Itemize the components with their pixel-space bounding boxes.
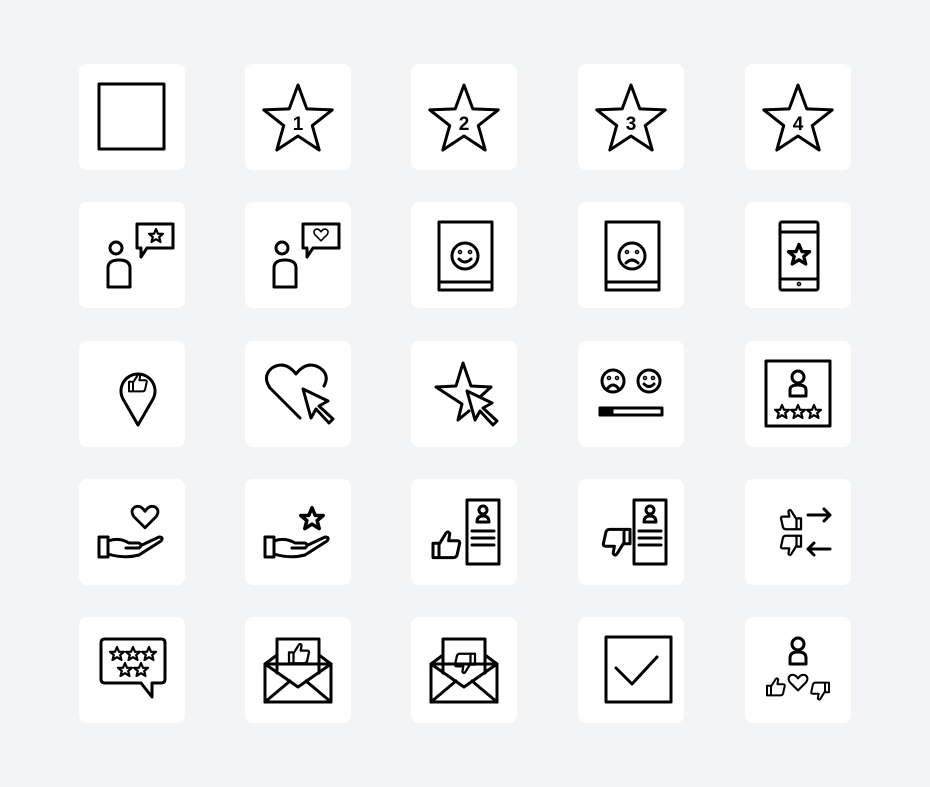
tile: thumbs with arrows xyxy=(745,479,851,585)
tile: star 4 xyxy=(745,64,851,170)
tile: star 1: 1 xyxy=(293,114,304,135)
tile: phone smile xyxy=(411,202,517,308)
tile: person with reactions xyxy=(745,617,851,723)
tile: star 3: 3 xyxy=(626,114,636,135)
tile: star 1 xyxy=(245,64,351,170)
tile: empty square xyxy=(79,64,185,170)
tile: envelope thumb up xyxy=(245,617,351,723)
tile: phone sad xyxy=(578,202,684,308)
tile: star 4: 4 xyxy=(793,114,804,135)
tile: person with star bubble xyxy=(79,202,185,308)
tile: faces slider xyxy=(578,341,684,447)
tile: star 2: 2 xyxy=(459,114,469,135)
tile: person with heart bubble xyxy=(245,202,351,308)
tile: chat bubble stars xyxy=(79,617,185,723)
tile: framed person three stars xyxy=(745,341,851,447)
tile: star cursor xyxy=(411,341,517,447)
tile: hand heart xyxy=(79,479,185,585)
tile: star 2 xyxy=(411,64,517,170)
tile: smartphone star xyxy=(745,202,851,308)
tile: heart cursor xyxy=(245,341,351,447)
tile: thumb down card xyxy=(578,479,684,585)
tile: hand star xyxy=(245,479,351,585)
tile: checkbox xyxy=(578,617,684,723)
tile: star 3 xyxy=(578,64,684,170)
tile: location pin thumb xyxy=(79,341,185,447)
tile: thumb up card xyxy=(411,479,517,585)
tile: envelope thumb down xyxy=(411,617,517,723)
